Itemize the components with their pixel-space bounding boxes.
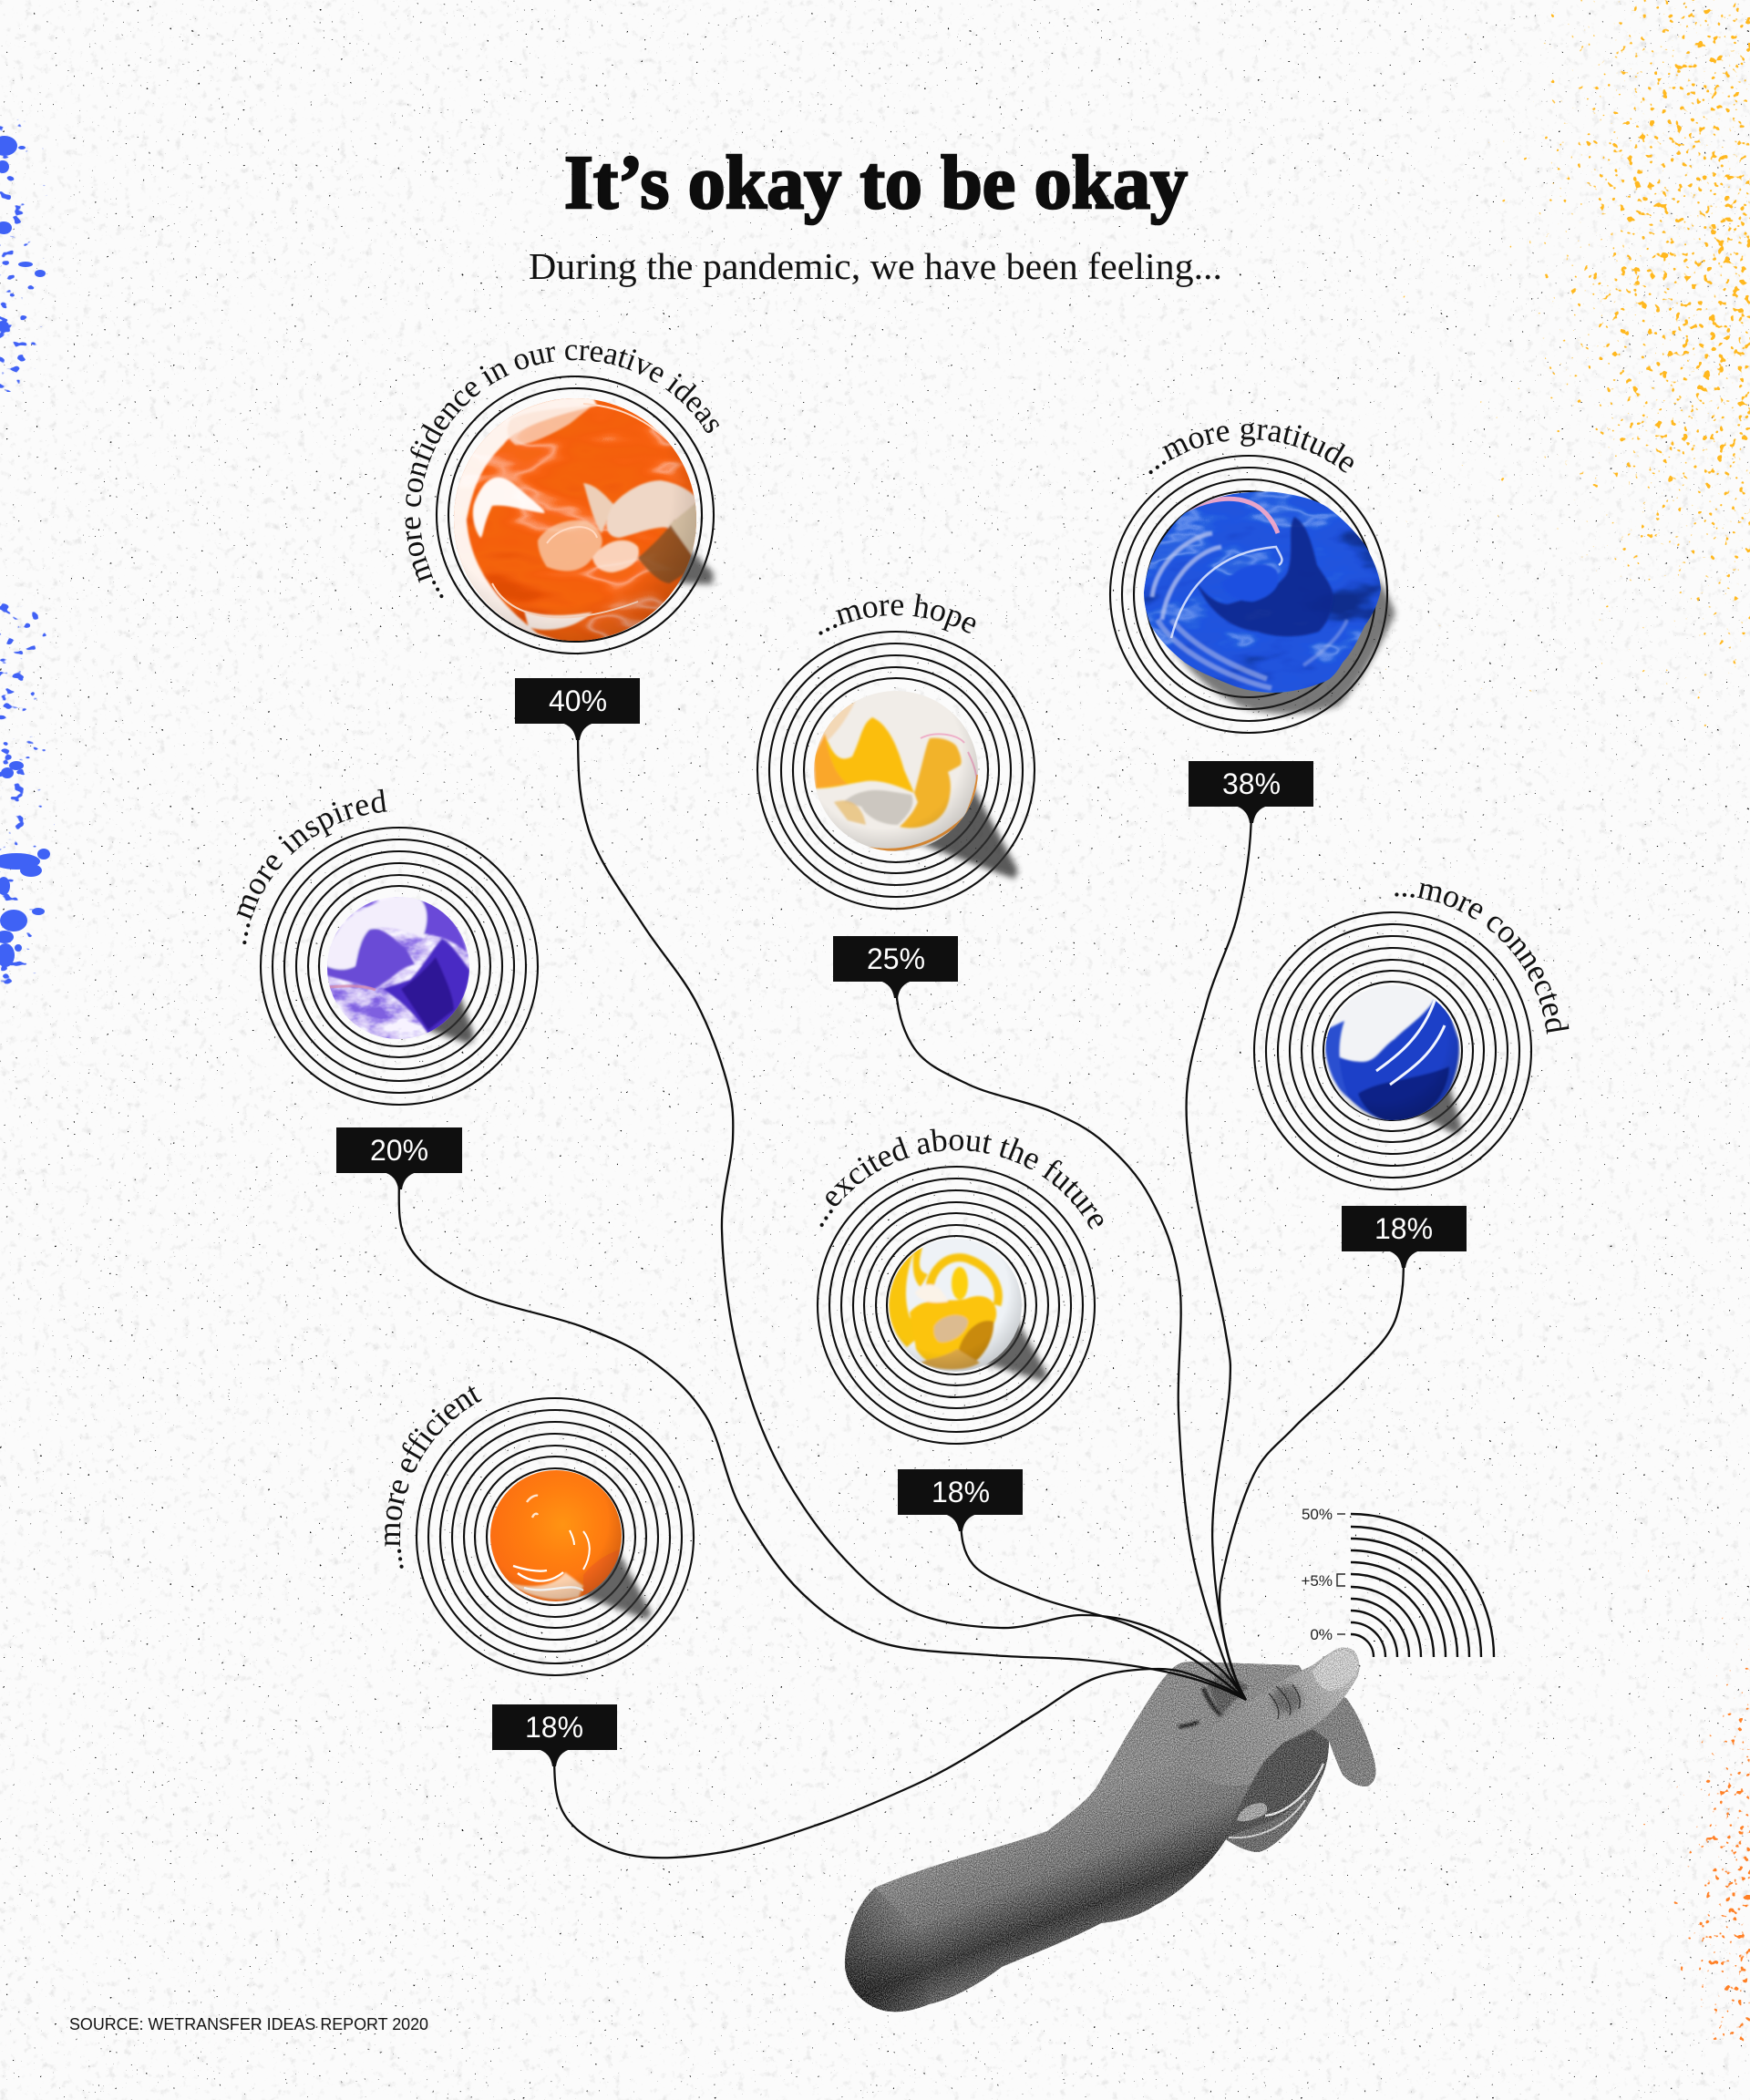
paint shadow (1354, 1021, 1498, 1165)
leader lines to the hand (399, 723, 1404, 1858)
value label: 20%: 20% (370, 1134, 428, 1167)
circle: more confidence in our creative ideas (405, 345, 720, 654)
value label: 20% (336, 1127, 462, 1189)
value label: 25%: 25% (867, 942, 925, 975)
arched label: ...more efficient (385, 1385, 482, 1569)
title: It’s okay to be okay (564, 140, 1188, 225)
value label: 18% excited: 18% (932, 1476, 990, 1508)
paint shadow (360, 930, 510, 1080)
circle: more efficient (385, 1385, 695, 1676)
source note: SOURCE: WETRANSFER IDEAS REPORT 2020 (69, 2015, 428, 2033)
value label: 40% (515, 678, 640, 740)
value label: 18% excited (898, 1469, 1023, 1531)
paint ball: orange (488, 1467, 624, 1604)
paint shadow (854, 723, 1059, 924)
leader: excited about the future (961, 1514, 1246, 1700)
legend labels: +5% (1302, 1572, 1333, 1590)
subtitle: During the pandemic, we have been feeling... (529, 245, 1222, 287)
rings (437, 376, 714, 654)
value label: 18% connected (1342, 1206, 1467, 1268)
paint shadow (523, 1498, 683, 1655)
paint splatter: orange bottom right (1632, 1549, 1750, 2042)
rings (261, 828, 538, 1105)
hand: arm and fingers (845, 1662, 1375, 2012)
legend labels: 0% (1310, 1626, 1333, 1643)
paint shadow (550, 461, 739, 639)
hand: thumb over lines (1176, 1648, 1359, 1786)
arched label: ...more connected (1395, 882, 1570, 1035)
value label: 18% connected: 18% (1374, 1212, 1433, 1245)
circle: more connected (1252, 882, 1570, 1190)
paint splatter: blue left edge (0, 118, 55, 984)
value label: 40%: 40% (549, 685, 607, 717)
rings (1254, 912, 1531, 1189)
arched label: ...more confidence in our creative ideas (405, 345, 720, 598)
value label: 38% (1189, 761, 1313, 823)
arched label: ...more gratitude (1148, 423, 1354, 474)
paint ball: purple (326, 896, 470, 1040)
circle: more gratitude (1108, 423, 1399, 734)
legend labels: 50% (1302, 1506, 1333, 1523)
legend arcs (1351, 1514, 1494, 1657)
circle: more inspired (237, 789, 540, 1106)
rings (818, 1167, 1095, 1444)
scale legend (1302, 1506, 1494, 1657)
rings (417, 1398, 694, 1675)
leader: more confidence (578, 723, 1246, 1700)
paint shadow (1158, 518, 1395, 714)
rings (757, 632, 1035, 909)
paint ball: blue and white (1323, 983, 1462, 1123)
leader: more efficient (554, 1669, 1246, 1858)
legend labels (1302, 1506, 1333, 1643)
arched label: ...excited about the future (820, 1128, 1103, 1230)
rings (1110, 456, 1387, 733)
value label: 18% efficient (492, 1704, 617, 1766)
leader: more inspired (399, 1173, 1246, 1700)
paint splatter: yellow top right (1385, 0, 1750, 747)
value label: 18% efficient: 18% (525, 1711, 583, 1744)
circle: more hope (757, 593, 1035, 910)
arched label: ...more inspired (237, 789, 387, 944)
value label: 25% (833, 936, 958, 998)
paint ball: orange (454, 398, 696, 641)
paint ball: yellow (889, 1239, 1022, 1372)
paint blob: blue (1139, 488, 1385, 697)
legend ticks (1337, 1514, 1345, 1634)
circle: excited about the future (817, 1128, 1103, 1445)
leader: more connected (1220, 1251, 1404, 1700)
leader: more gratitude (1187, 806, 1251, 1700)
value label: 38%: 38% (1222, 767, 1281, 800)
arched label: ...more hope (818, 593, 975, 635)
leader: more hope (896, 982, 1246, 1700)
paint ball: cream and yellow (811, 688, 981, 854)
paint shadow (923, 1266, 1077, 1417)
